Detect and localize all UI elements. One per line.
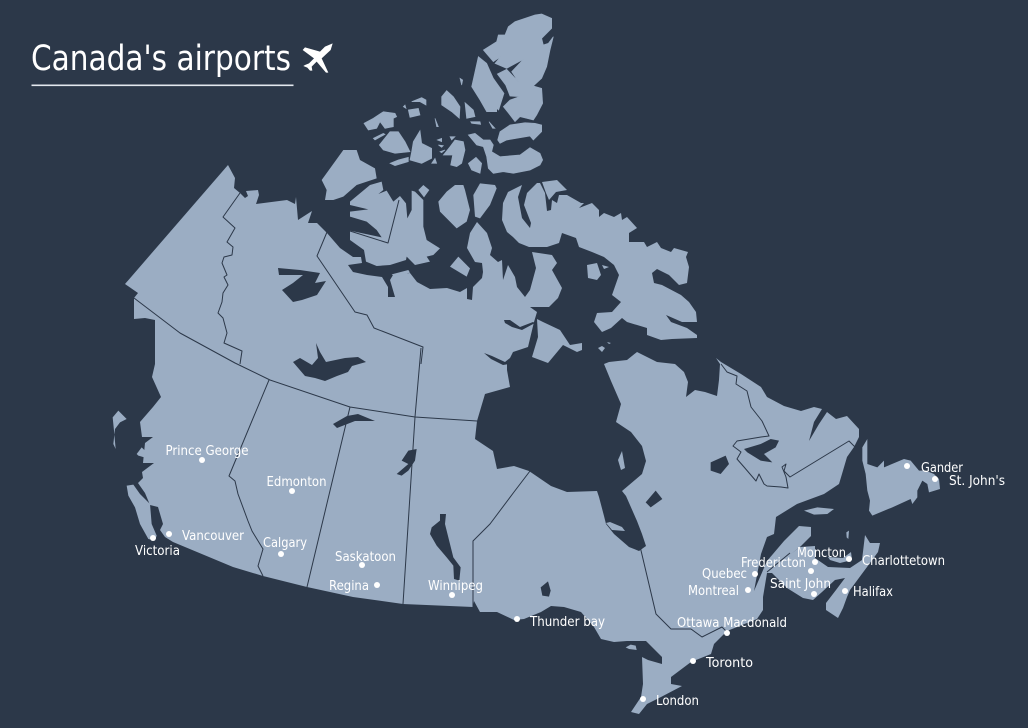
airport: Halifax	[842, 584, 893, 600]
airport: Fredericton: Fredericton	[741, 555, 806, 571]
airport: Thunder bay: Thunder bay	[529, 614, 605, 630]
airport: Prince George: Prince George	[166, 443, 248, 459]
Baffin Island	[502, 180, 697, 340]
airport: Winnipeg: Winnipeg	[428, 578, 483, 594]
airport: Victoria	[135, 535, 180, 559]
airport: Gander	[904, 460, 963, 476]
airport: London: London	[656, 693, 699, 709]
airport: Saint John: Saint John	[770, 576, 831, 592]
province boundaries	[134, 193, 855, 637]
airport: Toronto: Toronto	[705, 655, 753, 671]
title underline	[32, 84, 294, 86]
arctic islands: central	[322, 150, 497, 277]
Pacific islands	[113, 411, 157, 541]
airport: Moncton: Moncton	[797, 545, 846, 561]
airport: Halifax: Halifax	[853, 584, 893, 600]
airport: Gander: Gander	[921, 460, 963, 476]
airport: Regina: Regina	[329, 578, 369, 594]
airport: St. John's: St. John's	[949, 473, 1005, 489]
icon: airplane	[303, 43, 333, 73]
Hudson Bay islands	[532, 263, 852, 563]
lakes and inlets	[278, 268, 535, 428]
airport: Charlottetown: Charlottetown	[862, 553, 945, 569]
airport: Saint John	[770, 576, 831, 597]
mainland	[125, 165, 880, 714]
airport: Victoria: Victoria	[135, 543, 180, 559]
airport: Calgary: Calgary	[263, 535, 307, 551]
arctic islands: north	[364, 14, 553, 173]
eastern islands	[626, 439, 940, 650]
airport: Montreal: Montreal	[688, 583, 739, 599]
airport: Ottawa Macdonald	[677, 615, 787, 636]
airport: Edmonton: Edmonton	[266, 474, 326, 490]
airport: Vancouver: Vancouver	[182, 528, 244, 544]
airport: Ottawa Macdonald: Ottawa Macdonald	[677, 615, 787, 631]
airport: London	[640, 693, 699, 709]
airport: Saskatoon: Saskatoon	[335, 549, 396, 565]
title: Canada's airports	[31, 39, 291, 79]
airport: Calgary	[263, 535, 307, 557]
airport: Moncton	[797, 545, 846, 565]
airport: Quebec: Quebec	[702, 566, 747, 582]
map of Canada	[113, 14, 940, 714]
